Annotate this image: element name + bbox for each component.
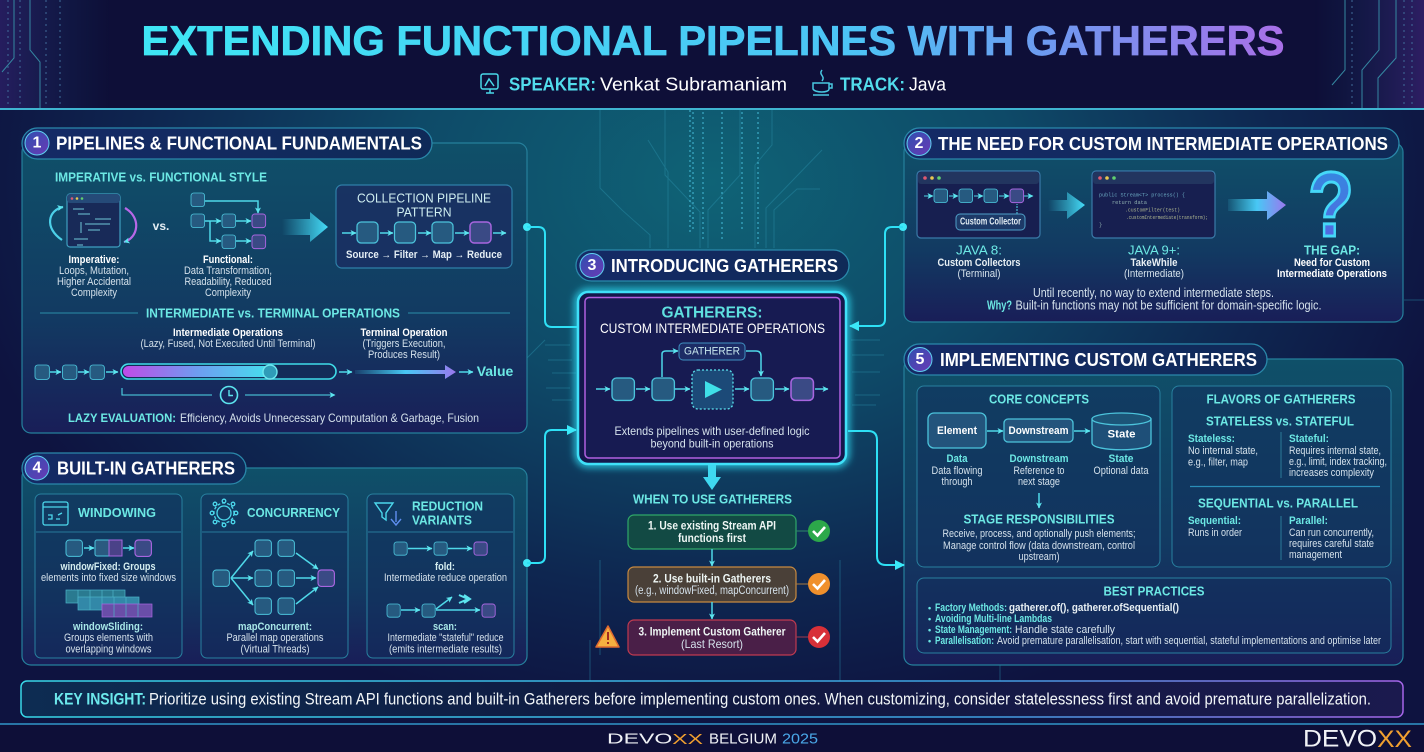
card: core concepts: upstream)	[1018, 551, 1060, 563]
text: the gap: THE GAP:	[1304, 242, 1360, 258]
card: reduction variants: (emits intermediate results)	[389, 644, 502, 656]
diagram: gatherer pipeline: GATHERER	[684, 346, 740, 358]
text: imperative description: Complexity	[71, 287, 117, 299]
card: gatherers definition	[578, 292, 846, 464]
card: flavors of gatherers: Stateless:	[1188, 433, 1235, 445]
card: core concepts: Manage control flow (data downstream, control	[943, 540, 1135, 552]
card: flavors of gatherers	[1172, 386, 1391, 567]
card: java 8 custom collector window	[917, 171, 1040, 238]
key insight bar: KEY INSIGHT:	[54, 690, 146, 708]
icon: java cup	[813, 70, 832, 95]
card: core concepts: Data	[946, 453, 968, 465]
text: functional description: Data Transformation,	[184, 265, 272, 277]
card: flavors of gatherers: Can run concurrently,	[1289, 527, 1374, 539]
card: core concepts: Element	[937, 425, 977, 437]
card: collection pipeline pattern: PATTERN	[396, 204, 452, 220]
text: why: Why?	[987, 298, 1012, 312]
text: lazy evaluation: Efficiency, Avoids Unnecessary Computation & Garbage, Fusion	[180, 411, 479, 425]
heading: panel 3	[576, 250, 849, 281]
card: gatherers definition: CUSTOM INTERMEDIATE OPERATIONS	[600, 320, 825, 336]
text: java 9: TakeWhile	[1130, 257, 1178, 269]
speaker and track line	[481, 70, 947, 95]
card: concurrency: CONCURRENCY	[247, 505, 340, 520]
icon: speaker monitor	[481, 74, 498, 93]
icon: concurrency gear	[210, 499, 238, 527]
footer: event name	[607, 730, 818, 748]
card: best practices: Handle state carefully	[1015, 624, 1115, 636]
text: why	[987, 286, 1322, 312]
footer: event name: 2025	[782, 730, 818, 748]
card: best practices: •	[928, 636, 931, 646]
card: core concepts: next stage	[1018, 476, 1060, 488]
card: java 8 custom collector window: Custom Collector	[960, 216, 1021, 228]
text: functional description: Complexity	[205, 287, 251, 299]
heading: panel 3: INTRODUCING GATHERERS	[611, 255, 838, 276]
text: intermediate operations: Intermediate Operations	[173, 327, 283, 339]
text: vs: vs.	[153, 219, 169, 233]
footer: devoxx logo: DEVO XX	[1303, 726, 1412, 752]
diagram: lazy evaluation bar	[35, 363, 513, 379]
speaker and track line: TRACK:	[840, 74, 905, 94]
card: best practices: •	[928, 614, 931, 624]
card: windowing	[35, 494, 182, 658]
card: gatherers definition: beyond built-in operations	[650, 436, 774, 450]
card: core concepts: Data flowing	[932, 465, 982, 477]
text: imperative description: Imperative:	[68, 254, 120, 266]
heading: panel 2: THE NEED FOR CUSTOM INTERMEDIATE OPERATIONS	[938, 133, 1388, 154]
card: gatherers definition: Extends pipelines with user-defined logic	[614, 424, 810, 438]
card: flavors of gatherers: requires careful state	[1289, 538, 1374, 550]
card: java 9 code window: return data	[1112, 199, 1148, 206]
card: core concepts: Reference to	[1014, 465, 1064, 477]
card: reduction variants	[367, 494, 514, 658]
diagram: functional flow	[191, 193, 266, 249]
step 1: 1. Use existing Stream API	[648, 518, 776, 532]
card: core concepts: through	[942, 476, 972, 488]
card: flavors of gatherers: FLAVORS OF GATHERERS	[1206, 392, 1356, 406]
footer: event name: DEVO XX	[607, 730, 703, 748]
heading: panel 5	[904, 344, 1267, 375]
icon: funnel	[375, 503, 401, 525]
card: collection pipeline pattern: Source → Filter → Map → Reduce	[346, 249, 502, 261]
icon: question mark: ?	[1308, 154, 1354, 256]
icon: state cylinder	[1092, 413, 1151, 450]
subheading: when to use gatherers: WHEN TO USE GATHERERS	[633, 492, 792, 506]
card: reduction variants: VARIANTS	[412, 512, 472, 528]
text: java 9	[1124, 242, 1184, 280]
card: reduction variants: REDUCTION	[412, 498, 483, 514]
speaker and track line: Venkat Subramaniam	[600, 74, 787, 94]
card: concurrency: Parallel map operations	[226, 632, 324, 644]
card: flavors of gatherers: e.g., filter, map	[1188, 456, 1248, 468]
card: flavors of gatherers: increases complexity	[1289, 467, 1374, 479]
icon: windowing	[43, 502, 68, 525]
text: terminal operation: (Triggers Execution,	[362, 338, 446, 350]
heading: panel 5: IMPLEMENTING CUSTOM GATHERERS	[940, 349, 1257, 370]
text: functional description: Readability, Reduced	[184, 276, 272, 288]
step 1	[628, 515, 830, 549]
text: terminal operation: Terminal Operation	[360, 327, 448, 339]
step 3: (Last Resort)	[681, 637, 743, 651]
step 2: (e.g., windowFixed, mapConcurrent)	[635, 585, 789, 597]
card: java 9 code window: public Stream<T> process() {	[1099, 192, 1185, 198]
card: collection pipeline pattern: COLLECTION PIPELINE	[357, 190, 491, 206]
card: best practices	[917, 578, 1391, 653]
text: the gap	[1277, 242, 1387, 280]
speaker and track line: Java	[909, 74, 947, 94]
card: core concepts: Downstream	[1010, 453, 1069, 465]
card: windowing: overlapping windows	[66, 644, 152, 656]
card: best practices: Avoiding Multi-line Lambdas	[935, 613, 1052, 625]
text: the gap: Need for Custom	[1294, 257, 1370, 269]
footer: event name: BELGIUM	[709, 730, 777, 748]
title: EXTENDING FUNCTIONAL PIPELINES WITH GATHERERS	[142, 17, 1284, 64]
text: intermediate operations: (Lazy, Fused, Not Executed Until Terminal)	[140, 338, 316, 350]
text: imperative description	[57, 254, 131, 299]
panel 3: introducing gatherers	[576, 250, 849, 655]
arrow: to collection pipeline	[282, 212, 328, 242]
icon: warning triangle	[596, 626, 619, 647]
card: core concepts	[917, 386, 1160, 567]
card: core concepts: CORE CONCEPTS	[989, 392, 1089, 406]
card: concurrency: (Virtual Threads)	[240, 644, 310, 656]
card: core concepts: Receive, process, and optionally push elements;	[942, 528, 1136, 540]
heading: panel 4: 4	[33, 460, 42, 476]
card: reduction variants: Intermediate reduce operation	[384, 572, 507, 584]
step 3: 3. Implement Custom Gatherer	[638, 624, 786, 638]
card: flavors of gatherers: Runs in order	[1188, 527, 1242, 539]
text: functional description: Functional:	[203, 254, 253, 266]
card: best practices: Factory Methods:	[935, 602, 1007, 614]
panel 1: pipelines and functional fundamentals	[22, 128, 527, 433]
subheading: intermediate vs terminal: INTERMEDIATE vs. TERMINAL OPERATIONS	[146, 306, 400, 320]
text: why: Built-in functions may not be sufficient for domain-specific logic.	[1016, 298, 1322, 312]
card: concurrency: mapConcurrent:	[238, 621, 312, 633]
text: lazy evaluation	[68, 411, 479, 425]
card: best practices: •	[928, 625, 931, 635]
heading: panel 2: 2	[915, 135, 924, 152]
card: windowing: Groups elements with	[64, 632, 153, 644]
connectors between panels	[523, 223, 907, 567]
card: flavors of gatherers: SEQUENTIAL vs. PARALLEL	[1198, 496, 1358, 510]
card: core concepts: State	[1108, 453, 1134, 465]
heading: panel 2	[904, 128, 1399, 159]
heading: panel 1	[22, 128, 432, 159]
arrows between steps	[711, 549, 713, 619]
card: java 9 code window: .customIntermediate(transform);	[1126, 214, 1208, 221]
key insight bar	[21, 681, 1403, 717]
text: java 8: Custom Collectors	[938, 257, 1020, 269]
text: the gap: Intermediate Operations	[1277, 268, 1387, 280]
step 3	[628, 620, 830, 655]
heading: panel 3: 3	[588, 257, 597, 274]
card: java 9 code window: }	[1099, 222, 1102, 228]
text: java 9: JAVA 9+:	[1128, 242, 1180, 258]
step 2: 2. Use built-in Gatherers	[653, 572, 771, 586]
speaker and track line: SPEAKER:	[509, 74, 596, 94]
text: java 8: JAVA 8:	[956, 242, 1002, 258]
card: best practices: Parallelisation:	[935, 635, 994, 647]
text: java 8: (Terminal)	[958, 268, 1000, 280]
text: terminal operation	[360, 327, 448, 361]
card: windowing: windowFixed: Groups	[60, 561, 156, 573]
card: windowing: WINDOWING	[78, 505, 156, 520]
step 2	[628, 567, 830, 602]
arrow: java 8 to java 9	[1048, 192, 1085, 219]
panel 4: built-in gatherers	[22, 453, 527, 665]
text: imperative description: Higher Accidental	[57, 276, 131, 288]
card: best practices: State Management:	[935, 624, 1012, 636]
card: concurrency	[201, 494, 348, 658]
text: terminal operation: Produces Result)	[368, 349, 440, 361]
text: lazy evaluation: LAZY EVALUATION:	[68, 411, 176, 425]
card: collection pipeline pattern	[336, 185, 512, 268]
card: flavors of gatherers: e.g., limit, index tracking,	[1289, 456, 1387, 468]
text: intermediate operations	[140, 327, 316, 350]
text: java 8	[938, 242, 1020, 280]
panel 2: the need for custom intermediate operations	[904, 128, 1403, 322]
card: gatherers definition: GATHERERS:	[662, 304, 762, 322]
subheading: imperative vs functional: IMPERATIVE vs. FUNCTIONAL STYLE	[55, 170, 267, 184]
icon: timeline clock	[122, 386, 335, 404]
card: java 9 code window: .customFilter(test)	[1125, 206, 1180, 214]
text: functional description	[184, 254, 272, 299]
heading: panel 1: 1	[33, 134, 42, 152]
card: flavors of gatherers: Sequential:	[1188, 515, 1241, 527]
icon: imperative code window	[50, 194, 136, 247]
card: core concepts: Optional data	[1094, 465, 1149, 477]
card: windowing: elements into fixed size windows	[41, 572, 176, 584]
text: imperative description: Loops, Mutation,	[59, 265, 129, 277]
card: flavors of gatherers: No internal state,	[1188, 445, 1258, 457]
heading: panel 1: PIPELINES & FUNCTIONAL FUNDAMENTALS	[56, 132, 422, 154]
card: flavors of gatherers: Requires internal state,	[1289, 445, 1381, 457]
heading: panel 5: 5	[916, 351, 925, 368]
card: flavors of gatherers: Parallel:	[1289, 515, 1328, 527]
card: flavors of gatherers: management	[1289, 549, 1342, 561]
arrow: java 9 to the gap	[1228, 191, 1286, 220]
card: core concepts: Downstream	[1008, 425, 1069, 437]
diagram: gatherer pipeline	[596, 343, 828, 409]
step 1: functions first	[678, 531, 746, 545]
card: reduction variants: fold:	[435, 561, 455, 573]
card: flavors of gatherers: Stateful:	[1289, 433, 1329, 445]
text: java 9: (Intermediate)	[1124, 268, 1184, 280]
card: best practices: gatherer.of(), gatherer.ofSequential()	[1009, 602, 1179, 614]
icon: state cylinder: State	[1108, 428, 1136, 440]
card: best practices: BEST PRACTICES	[1104, 584, 1205, 598]
card: java 9 code window	[1092, 171, 1215, 238]
card: core concepts: STAGE RESPONSIBILITIES	[964, 512, 1115, 526]
card: flavors of gatherers: STATELESS vs. STATEFUL	[1206, 414, 1354, 428]
text: why: Until recently, no way to extend intermediate steps.	[1033, 286, 1274, 300]
card: best practices: •	[928, 603, 931, 613]
card: reduction variants: Intermediate "stateful" reduce	[388, 632, 504, 644]
arrow: down to when to use	[703, 465, 721, 490]
card: reduction variants: scan:	[433, 621, 457, 633]
card: windowing: windowSliding:	[72, 621, 143, 633]
heading: panel 4: BUILT-IN GATHERERS	[57, 458, 235, 478]
heading: panel 4	[22, 453, 246, 484]
diagram: lazy evaluation bar: Value	[477, 363, 513, 379]
panel 5: implementing custom gatherers	[904, 344, 1403, 665]
